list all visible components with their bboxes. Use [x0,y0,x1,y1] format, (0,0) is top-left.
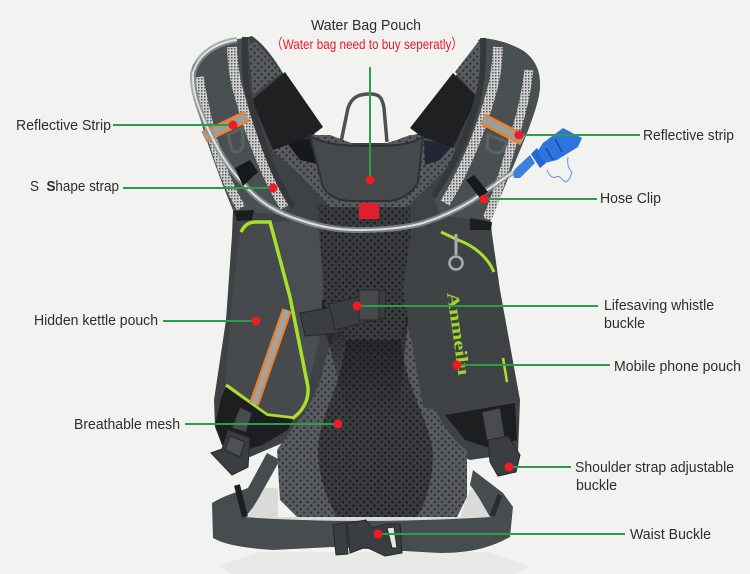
back panel silhouette [192,36,540,460]
shoulder strap right [433,38,540,222]
label: s shape strap: S Shape strap [30,178,119,195]
label: reflective strip left: Reflective Strip [16,117,111,134]
reflective strip left [204,116,247,137]
waist belt [212,453,513,553]
black bands under straps [234,210,492,231]
label: hose clip: Hose Clip [600,190,661,207]
inner openings [287,138,453,165]
label: mobile phone pouch: Mobile phone pouch [614,358,741,375]
blue bite valve [513,128,582,182]
black inner strap panels [252,72,477,150]
label: lifesaving whistle buckle: Lifesaving whistle [604,297,714,314]
carry handle [341,94,387,142]
callout lines [113,67,640,534]
brand name: Anmeilu [443,291,474,377]
waist buckle [333,520,402,556]
label: hidden kettle pouch: Hidden kettle pouch [34,312,158,329]
callout dots [228,120,524,538]
belt shadow [246,488,497,520]
floor shadow [218,552,530,574]
upper mesh panel [272,135,460,207]
center back mesh [318,205,412,340]
label: water bag note: （Water bag need to buy seperatly） [271,36,463,52]
shoulder strap buckle left [211,407,252,475]
backpack illustration [192,36,582,556]
right phone pouch [403,230,515,415]
zipper ring [450,234,462,270]
black pad under left pouch [215,387,293,452]
hydration tube [193,40,513,230]
red pull tab [359,203,379,219]
shoulder strap left [192,37,293,215]
reflective strip right [483,119,523,140]
upper shoulder mesh pads [248,42,485,95]
d-rings [228,128,507,153]
label: breathable mesh: Breathable mesh [74,416,180,433]
label: water bag pouch: Water Bag Pouch [311,17,421,34]
collar pouch [310,136,423,201]
black pad under right pouch [445,403,517,448]
left kettle pouch [225,220,322,418]
shoulder strap buckle right [482,408,520,476]
lower mesh pad [277,300,467,517]
label: lifesaving whistle buckle [604,297,714,332]
label: lifesaving whistle buckle: buckle [604,315,645,332]
label: shoulder strap adjustable buckle: buckle [576,477,617,494]
label: shoulder strap adjustable buckle [575,459,734,494]
hose clips [235,160,488,198]
label: waist buckle: Waist Buckle [630,526,711,543]
label: shoulder strap adjustable buckle: Shoulder strap adjustable [575,459,734,476]
label: reflective strip right: Reflective strip [643,127,734,144]
whistle buckle [300,290,386,336]
